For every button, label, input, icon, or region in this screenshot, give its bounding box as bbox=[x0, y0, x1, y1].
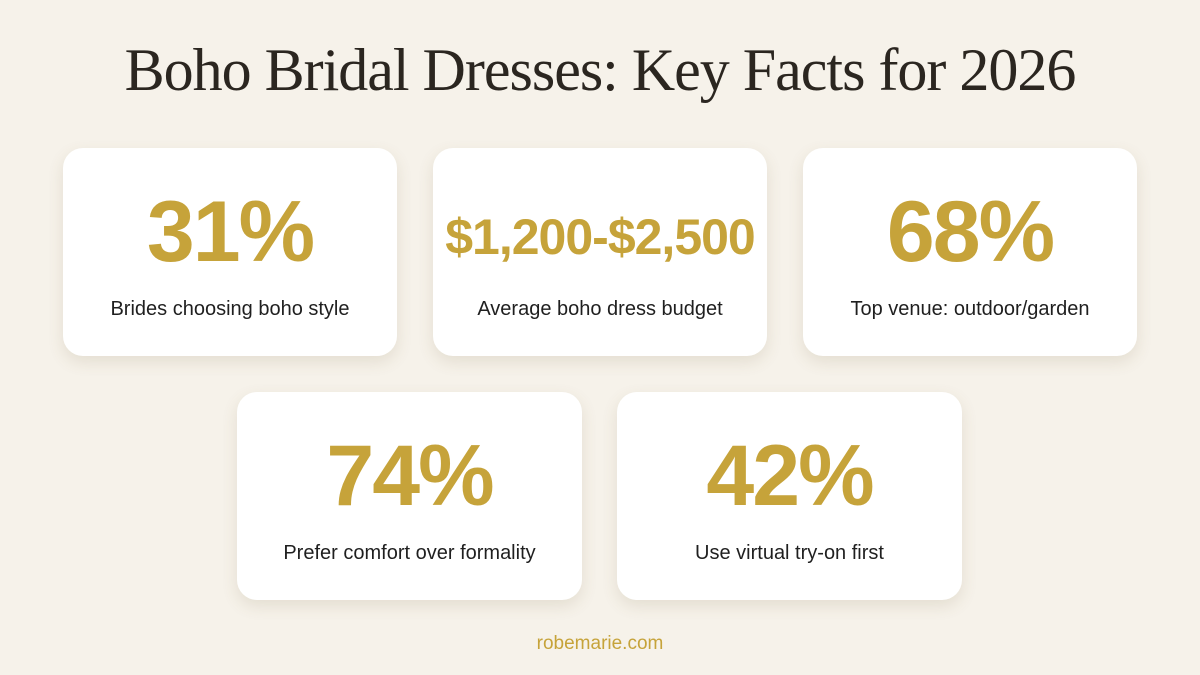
card: venue bbox=[803, 148, 1137, 356]
card: comfort: 74% bbox=[326, 428, 493, 524]
card: virtual try-on: 42% bbox=[706, 428, 873, 524]
card: budget: $1,200-$2,500 bbox=[445, 209, 755, 265]
card: comfort: Prefer comfort over formality bbox=[283, 542, 536, 564]
card: boho style bbox=[63, 148, 397, 356]
footer: robemarie.com bbox=[537, 633, 663, 654]
card: virtual try-on: Use virtual try-on first bbox=[695, 542, 884, 564]
card: boho style: Brides choosing boho style bbox=[110, 298, 350, 320]
card: venue: 68% bbox=[887, 184, 1053, 280]
card: venue: Top venue: outdoor/garden bbox=[850, 298, 1090, 320]
card: budget bbox=[433, 148, 767, 356]
title: Boho Bridal Dresses: Key Facts for 2026 bbox=[125, 37, 1075, 103]
card: virtual try-on bbox=[617, 392, 962, 600]
card: comfort bbox=[237, 392, 582, 600]
card: budget: Average boho dress budget bbox=[477, 298, 723, 320]
card: boho style: 31% bbox=[147, 184, 313, 280]
